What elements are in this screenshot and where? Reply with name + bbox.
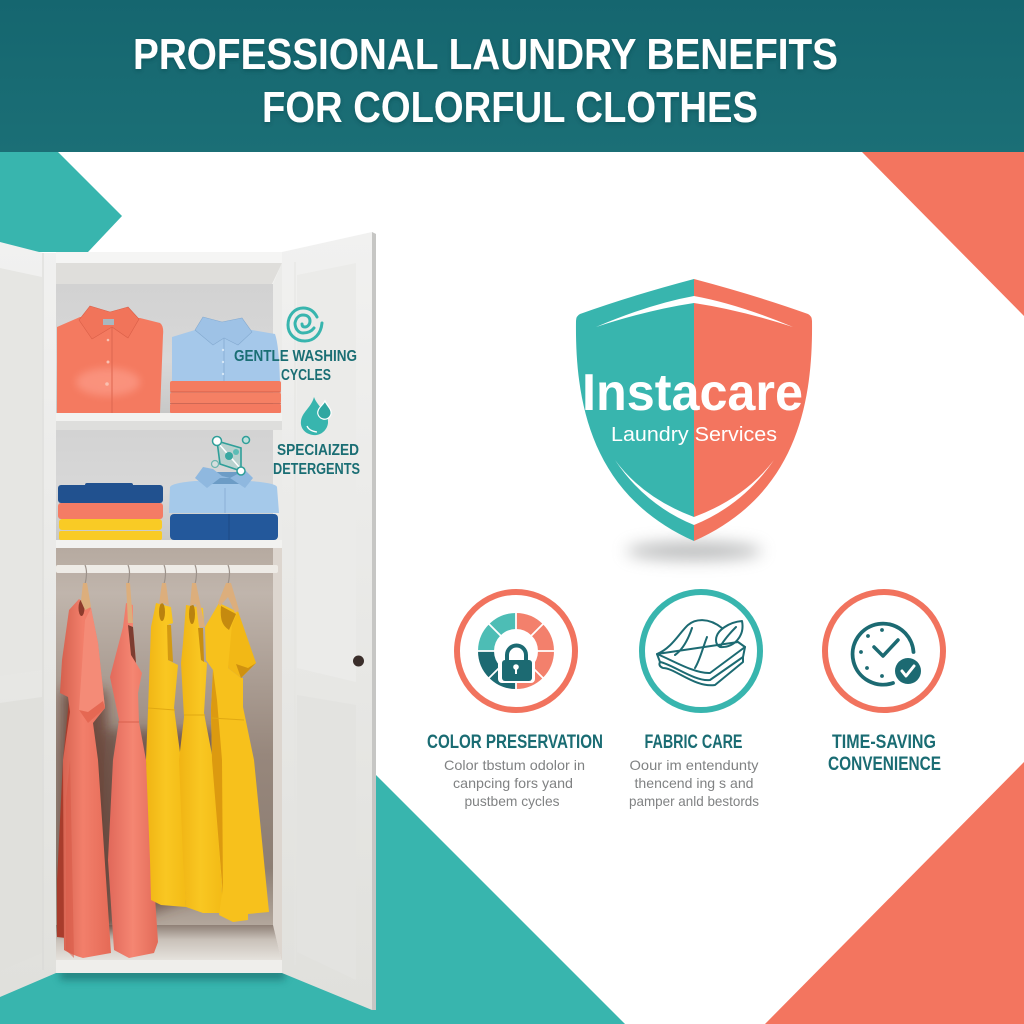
icon: swirl (288, 308, 322, 341)
hangers (81, 565, 239, 627)
ring (642, 592, 760, 710)
logo tagline: Laundry Services (611, 424, 777, 446)
shadow behind dresses (62, 690, 215, 930)
label: specialized detergents: SPECIAIZED (277, 442, 359, 459)
coral dress 2 (108, 603, 158, 958)
benefit: time-saving convenience (825, 592, 943, 775)
heading: CONVENIENCE (828, 754, 941, 775)
heading: TIME-SAVING (832, 732, 936, 753)
description: Color tbstum odolor in (444, 757, 585, 773)
right door (282, 232, 376, 1010)
ring (825, 592, 943, 710)
coral shirt (57, 306, 163, 413)
yellow dress 3 (146, 603, 186, 907)
heading (828, 732, 941, 775)
icon: clock with check badge (853, 624, 921, 685)
icon: water drops (301, 397, 331, 435)
header banner (0, 0, 1024, 152)
icon: molecule (212, 436, 250, 475)
title: PROFESSIONAL LAUNDRY BENEFITS (133, 30, 838, 79)
shield right half (694, 279, 812, 541)
description: canpcing fors yand (453, 775, 573, 791)
shield bottom arc (615, 460, 774, 525)
logo shield (576, 279, 812, 560)
wardrobe (0, 232, 376, 1010)
benefit: color preservation (427, 592, 603, 809)
description: Oour im entendunty (630, 757, 758, 773)
label: specialized detergents: DETERGENTS (273, 461, 360, 478)
closet interior (56, 252, 282, 973)
yellow dress 5 (205, 603, 269, 922)
ring (457, 592, 575, 710)
shield top arc (596, 296, 793, 327)
description: pamper anld bestords (629, 793, 759, 809)
title (133, 30, 838, 132)
lower blue shirt and navy stack (169, 467, 279, 540)
description (444, 757, 585, 809)
title: FOR COLORFUL CLOTHES (262, 83, 758, 132)
closet shadow on floor (60, 968, 285, 980)
description (629, 757, 759, 809)
shield shadow (626, 542, 762, 560)
description: pustbem cycles (464, 793, 560, 809)
logo wordmark: Instacare (582, 364, 803, 422)
label: gentle washing cycles (234, 308, 357, 384)
label: gentle washing cycles: GENTLE WASHING (234, 348, 357, 365)
icon: folded fabric with leaf (657, 620, 745, 685)
hanging rail (56, 565, 278, 573)
shield left half (576, 279, 694, 541)
benefit: fabric care (629, 592, 760, 809)
left door (0, 242, 56, 997)
left folded stack (58, 483, 163, 540)
heading: COLOR PRESERVATION (427, 732, 603, 753)
heading: FABRIC CARE (644, 732, 742, 753)
shelves (56, 413, 282, 548)
door knob (353, 656, 364, 666)
label: gentle washing cycles: CYCLES (281, 367, 331, 384)
description: thencend ing s and (634, 775, 754, 791)
folded blue shirt with coral stack (170, 317, 281, 413)
icon: color wheel with lock (476, 611, 556, 691)
yellow dress 4 (179, 604, 222, 913)
coral dress 1 (57, 599, 111, 958)
label: specialized detergents (273, 397, 360, 478)
